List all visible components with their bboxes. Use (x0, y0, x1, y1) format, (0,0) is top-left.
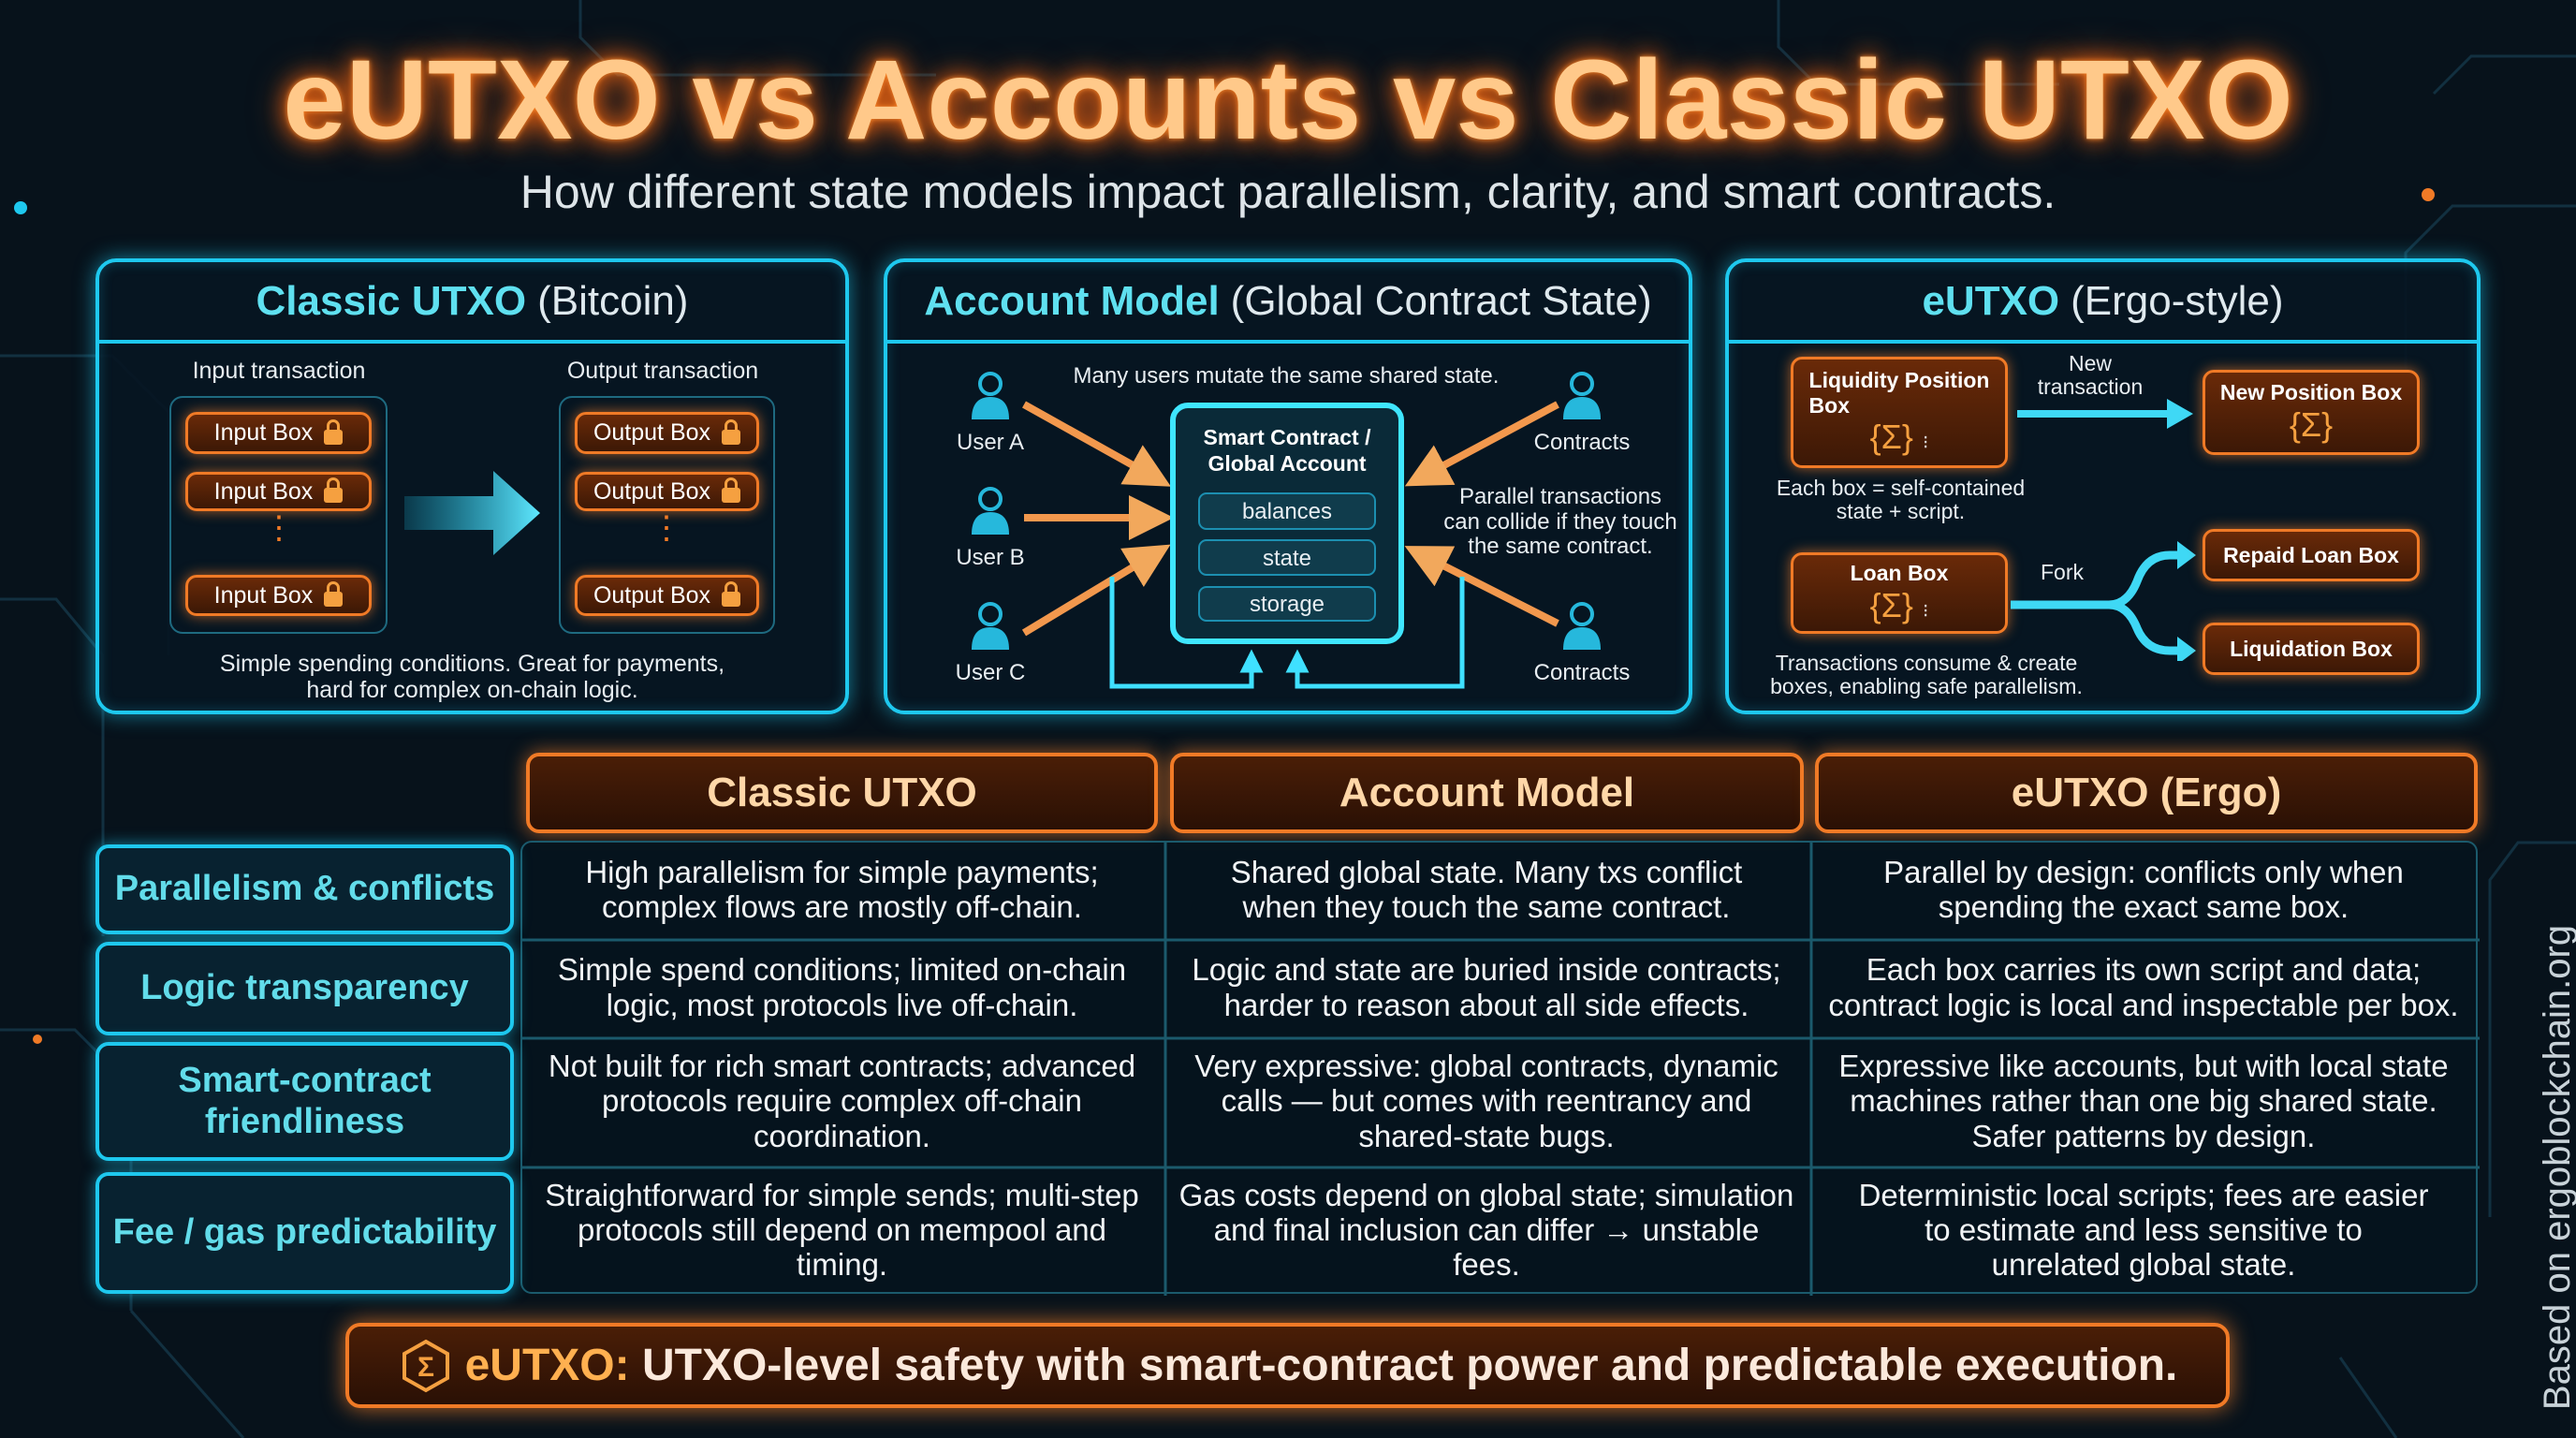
new transaction label (2038, 351, 2143, 399)
eUTXO diagram (1770, 346, 2430, 698)
row 1 cells: complex flows are mostly off-chain. (602, 889, 1082, 924)
table header: account model (1170, 753, 1804, 833)
caption: each box: state + script. (1837, 499, 1965, 523)
new position box: {Σ} (2290, 405, 2333, 444)
caption: transactions (1770, 651, 2083, 698)
repaid loan box: Repaid Loan Box (2223, 543, 2399, 567)
arrow: new transaction (2017, 399, 2193, 429)
fork label: Fork (2041, 560, 2084, 584)
row label: parallelism: Parallelism & conflicts (115, 869, 494, 908)
row 2 cells: logic, most protocols live off-chain. (607, 987, 1077, 1022)
loan box (1791, 552, 2008, 634)
row 4 cells: fees. (1453, 1247, 1520, 1282)
bottom banner: eUTXO: UTXO-level safety with smart-contract power and predictable execution. (465, 1341, 2177, 1390)
panel: eUTXO (1725, 258, 2481, 714)
account model diagram (956, 363, 1677, 689)
label: output transaction: Output transaction (567, 358, 758, 384)
classic UTXO diagram (169, 358, 775, 702)
input dots: ⋮ (263, 510, 295, 546)
users (972, 374, 1601, 650)
row 3 cells: protocols require complex off-chain (602, 1083, 1082, 1118)
row 3 cells: machines rather than one big shared state. (1850, 1083, 2437, 1118)
row 3 cells: Safer patterns by design. (1972, 1119, 2315, 1153)
heading (99, 262, 845, 344)
input box 2: Input Box (214, 477, 313, 504)
account model diagram: storage (1250, 592, 1325, 617)
row 4 cells: unrelated global state. (1992, 1247, 2295, 1282)
account model diagram: Contracts (1534, 660, 1630, 685)
output dots: ⋮ (651, 510, 682, 546)
liquidity position box: Liquidity Position (1809, 368, 1989, 392)
row label: fee predictability (95, 1172, 514, 1294)
cyan loop arrows (1112, 577, 1462, 686)
account model diagram: User B (956, 545, 1025, 570)
bottom banner (345, 1323, 2230, 1408)
liquidation box: Liquidation Box (2230, 637, 2393, 661)
output container (559, 396, 775, 634)
label: input transaction: Input transaction (193, 358, 365, 384)
row 1 cells: Shared global state. Many txs conflict (1231, 855, 1742, 889)
account model diagram: User C (956, 660, 1025, 685)
heading: Account Model (924, 277, 1220, 324)
account model diagram: Parallel transactions (1459, 484, 1661, 509)
row 4 cells (545, 1178, 2428, 1282)
input box 3 (185, 575, 372, 616)
heading (887, 262, 1689, 344)
heading: (Bitcoin) (537, 277, 688, 324)
table header: classic UTXO: Classic UTXO (707, 770, 977, 815)
caption: Simple spending conditions. Great for payments, (220, 651, 724, 677)
output box 1 (575, 412, 759, 454)
row 4 cells: Straightforward for simple sends; multi-step (545, 1178, 1139, 1212)
table header: eUTXO (1815, 753, 2478, 833)
heading (1729, 262, 2477, 344)
row 3 cells: Very expressive: global contracts, dynamic (1194, 1049, 1778, 1083)
icon: sigma hexagon: Σ (417, 1352, 434, 1382)
row label: logic transparency (95, 942, 514, 1035)
heading: Classic UTXO (256, 277, 526, 324)
panel: classic UTXO (95, 258, 849, 714)
account model diagram: the same contract. (1468, 534, 1653, 559)
liquidity position box: Box (1809, 393, 1850, 418)
row label: logic transparency: Logic transparency (140, 968, 469, 1007)
table header: classic UTXO (526, 753, 1158, 833)
account model diagram: Smart Contract / (1204, 425, 1371, 449)
row 4 cells: Gas costs depend on global state; simulation (1179, 1178, 1793, 1212)
row 3 cells: shared-state bugs. (1358, 1119, 1615, 1153)
orange arrows (1024, 404, 1558, 633)
row 2 cells: Logic and state are buried inside contracts; (1192, 952, 1781, 987)
smart contract box (1173, 405, 1401, 641)
row label: smart-contract friendliness (95, 1042, 514, 1161)
table header: eUTXO: eUTXO (Ergo) (2012, 770, 2281, 815)
output box 2: Output Box (593, 477, 710, 504)
row label: smart-contract friendliness: friendliness (205, 1101, 404, 1140)
row 1 cells: spending the exact same box. (1939, 889, 2349, 924)
caption top: Many users mutate the same shared state. (1074, 363, 1499, 389)
caption: each box: Each box = self-contained (1777, 476, 2025, 500)
heading: eUTXO (1922, 277, 2059, 324)
account model diagram: can collide if they touch (1443, 509, 1677, 535)
row 4 cells: Deterministic local scripts; fees are easier (1859, 1178, 2428, 1212)
row 1 cells: High parallelism for simple payments; (585, 855, 1099, 889)
panel: account model (884, 258, 1692, 714)
heading: (Ergo-style) (2071, 277, 2284, 324)
row 1 cells: when they touch the same contract. (1243, 889, 1730, 924)
row label: fee predictability: Fee / gas predictability (113, 1212, 496, 1252)
account model diagram: Contracts (1534, 430, 1630, 455)
row label: smart-contract friendliness: Smart-contract (178, 1061, 432, 1100)
loan box: Loan Box (1851, 561, 1948, 585)
new transaction label: transaction (2038, 374, 2143, 399)
arrow: input to output (404, 471, 540, 555)
account model diagram: balances (1242, 499, 1332, 524)
row 2 cells: contract logic is local and inspectable per box. (1828, 987, 2459, 1022)
input box 3: Input Box (214, 582, 313, 609)
output box 1: Output Box (593, 419, 710, 446)
output box 3: Output Box (593, 582, 710, 609)
liquidity position box (1791, 357, 2008, 468)
account model diagram: User A (957, 430, 1024, 455)
loan box: {Σ} ⁝ (1870, 586, 1928, 624)
output box 3 (575, 575, 759, 616)
caption: transactions: Transactions consume & create (1776, 651, 2077, 675)
input box 2 (185, 472, 372, 511)
fork arrows (2011, 541, 2196, 661)
input container (169, 396, 388, 634)
new position box (2203, 370, 2420, 455)
subtitle: How different state models impact parallelism, clarity, and smart contracts. (520, 166, 2056, 218)
output box 2 (575, 472, 759, 511)
row 4 cells: timing. (797, 1247, 887, 1282)
row 2 cells: harder to reason about all side effects. (1224, 987, 1749, 1022)
row 3 cells: Not built for rich smart contracts; advanced (549, 1049, 1135, 1083)
row 1 cells (585, 855, 2404, 924)
new transaction label: New (2069, 351, 2112, 375)
caption: hard for complex on-chain logic. (306, 676, 638, 702)
liquidation box (2203, 623, 2420, 675)
row 3 cells: Expressive like accounts, but with local state (1838, 1049, 2449, 1083)
caption: each box (1777, 476, 2025, 523)
row 4 cells: to estimate and less sensitive to (1925, 1212, 2363, 1247)
row 4 cells: and final inclusion can differ → unstable (1214, 1212, 1759, 1247)
row 4 cells: protocols still depend on mempool and (578, 1212, 1106, 1247)
input box 1 (185, 412, 372, 454)
repaid loan box (2203, 529, 2420, 581)
table header: account model: Account Model (1339, 770, 1634, 815)
row 3 cells: calls — but comes with reentrancy and (1222, 1083, 1751, 1118)
account model diagram: Global Account (1208, 451, 1367, 476)
row label: parallelism (95, 844, 514, 934)
liquidity position box: {Σ} ⁝ (1870, 418, 1928, 456)
row 2 cells: Each box carries its own script and data; (1866, 952, 2421, 987)
new position box: New Position Box (2220, 380, 2402, 404)
row 1 cells: Parallel by design: conflicts only when (1883, 855, 2404, 889)
input box 1: Input Box (214, 419, 313, 446)
row 2 cells (558, 952, 2459, 1022)
caption: transactions: boxes, enabling safe parallelism. (1770, 674, 2083, 698)
account model diagram: state (1263, 546, 1311, 571)
heading: (Global Contract State) (1231, 277, 1652, 324)
row 3 cells (549, 1049, 2449, 1153)
row 3 cells: coordination. (754, 1119, 930, 1153)
row 2 cells: Simple spend conditions; limited on-chain (558, 952, 1126, 987)
title: eUTXO vs Accounts vs Classic UTXO (283, 36, 2293, 163)
caption (220, 651, 724, 702)
icon: sigma hexagon (402, 1339, 449, 1393)
comparison table grid (520, 841, 2478, 1294)
